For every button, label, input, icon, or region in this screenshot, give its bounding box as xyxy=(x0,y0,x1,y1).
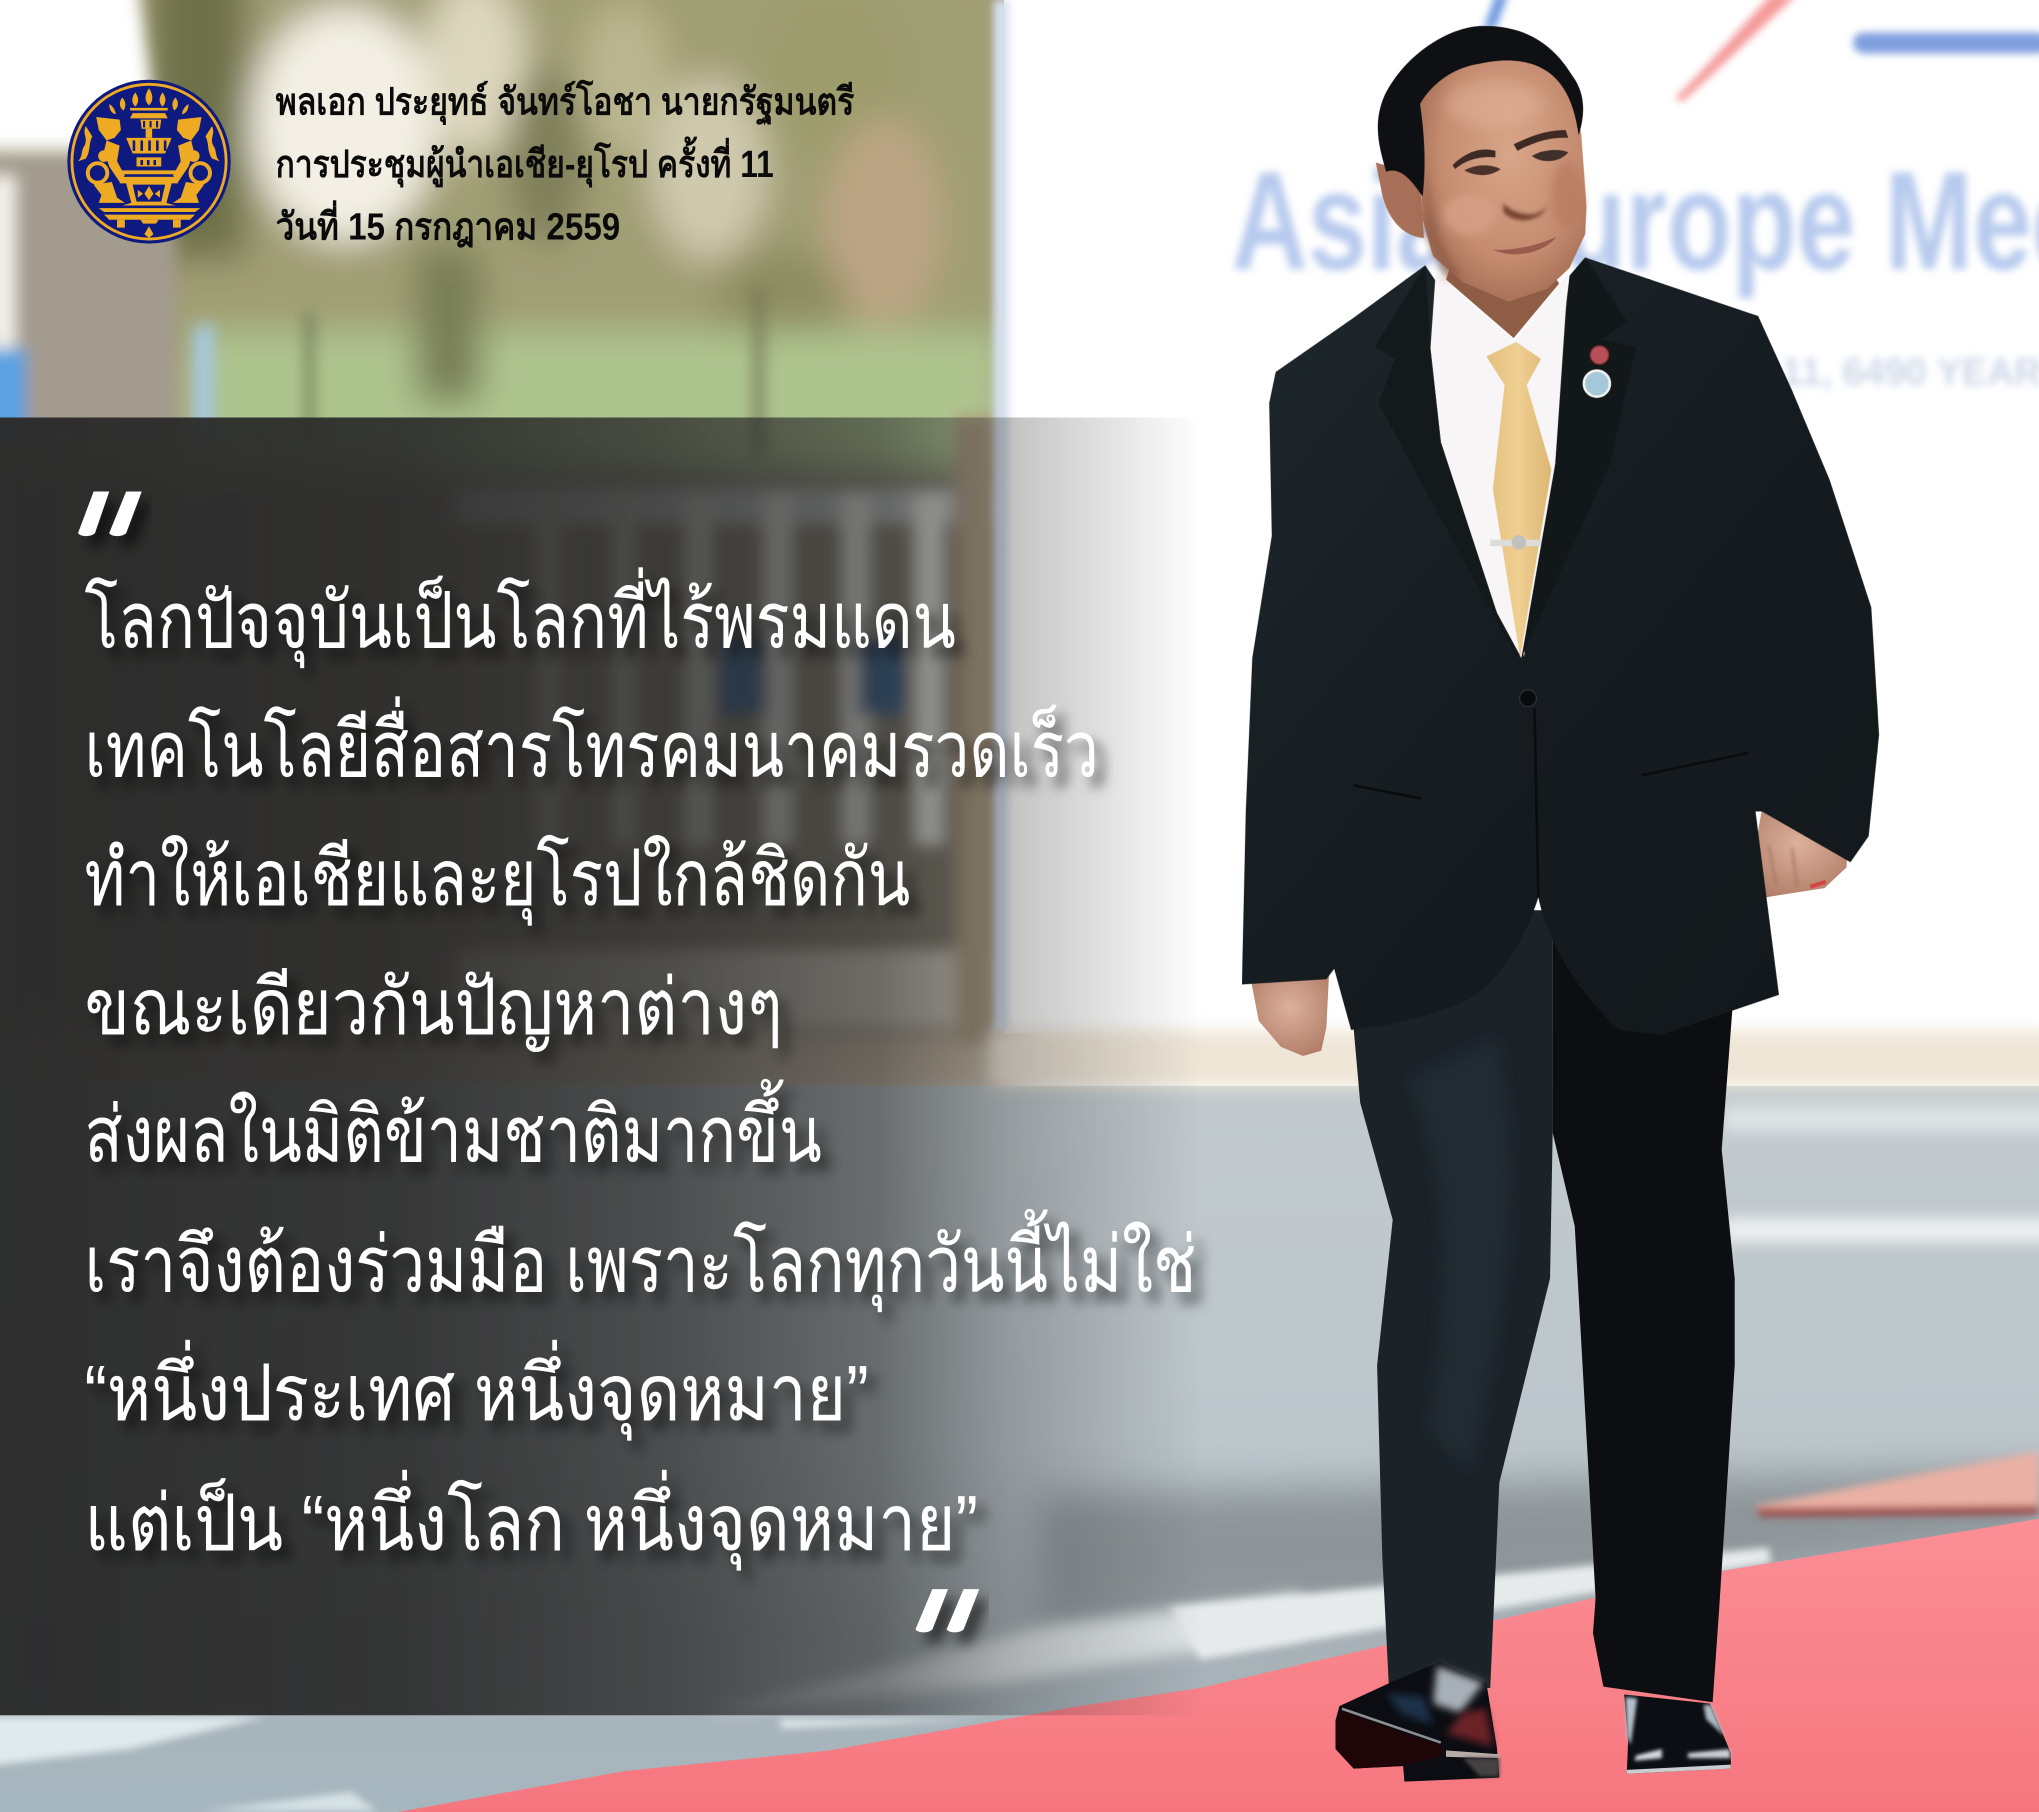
emblem base band xyxy=(99,208,200,238)
panel: dark gradient quote background xyxy=(0,417,1203,1715)
event name: การประชุมผู้นำเอเชีย-ยุโรป ครั้งที่ 11 xyxy=(276,136,774,188)
jacket xyxy=(1242,257,1879,1035)
date: วันที่ 15 กรกฎาคม 2559 xyxy=(276,199,620,247)
neck shadow xyxy=(1446,247,1559,338)
ear xyxy=(1376,163,1424,238)
quote line 3: ทำให้เอเชียและยุโรปใกล้ชิดกัน xyxy=(85,834,910,926)
emblem: Office of the Prime Minister seal xyxy=(67,80,231,244)
icon: closing quote mark xyxy=(915,1589,979,1632)
emblem lions xyxy=(78,117,220,203)
ground: kerb, road, stripes and carpets xyxy=(0,1030,2039,1812)
hand right xyxy=(1748,809,1848,897)
pin red xyxy=(1590,346,1609,364)
shirt xyxy=(1430,273,1568,658)
quote line 8: แต่เป็น “หนึ่งโลก หนึ่งจุดหมาย” xyxy=(85,1470,978,1571)
nose xyxy=(1503,203,1547,220)
emblem pedestal xyxy=(120,177,178,205)
emblem flames xyxy=(109,88,189,114)
hand left xyxy=(1251,975,1329,1056)
quote line 7: “หนึ่งประเทศ หนึ่งจุดหมาย” xyxy=(85,1340,869,1441)
emblem urn xyxy=(120,108,178,174)
jacket button xyxy=(1519,690,1536,707)
subject: standing man in dark suit xyxy=(1242,26,1879,1782)
pin blue xyxy=(1584,371,1610,397)
face shading xyxy=(1425,81,1583,280)
speaker name: พลเอก ประยุทธ์ จันทร์โอชา นายกรัฐมนตรี xyxy=(276,79,854,125)
tie xyxy=(1486,342,1551,658)
header text block xyxy=(276,79,854,247)
quote line 5: ส่งผลในมิติข้ามชาติมากขึ้น xyxy=(85,1078,822,1178)
face xyxy=(1417,47,1586,302)
shoe right xyxy=(1624,1694,1731,1774)
icon: opening quote mark xyxy=(78,492,142,536)
quote line 2: เทคโนโลยีสื่อสารโทรคมนาคมรวดเร็ว xyxy=(85,696,1099,793)
brows and eyes xyxy=(1453,130,1568,175)
quote line 4: ขณะเดียวกันปัญหาต่างๆ xyxy=(85,963,783,1052)
quote text block xyxy=(85,568,1196,1571)
hair xyxy=(1378,26,1583,196)
pockets xyxy=(1354,709,1748,897)
quote line 6: เราจึงต้องร่วมมือ เพราะโลกทุกวันนี้ไม่ใช่ xyxy=(85,1208,1196,1312)
head xyxy=(1376,26,1586,338)
lapels xyxy=(1375,257,1636,658)
banner behind the subject xyxy=(993,0,2039,1034)
trousers xyxy=(1352,910,1740,1702)
mouth xyxy=(1493,237,1557,254)
quote line 1: โลกปัจจุบันเป็นโลกที่ไร้พรมแดน xyxy=(85,568,956,669)
shoe left xyxy=(1335,1662,1499,1782)
